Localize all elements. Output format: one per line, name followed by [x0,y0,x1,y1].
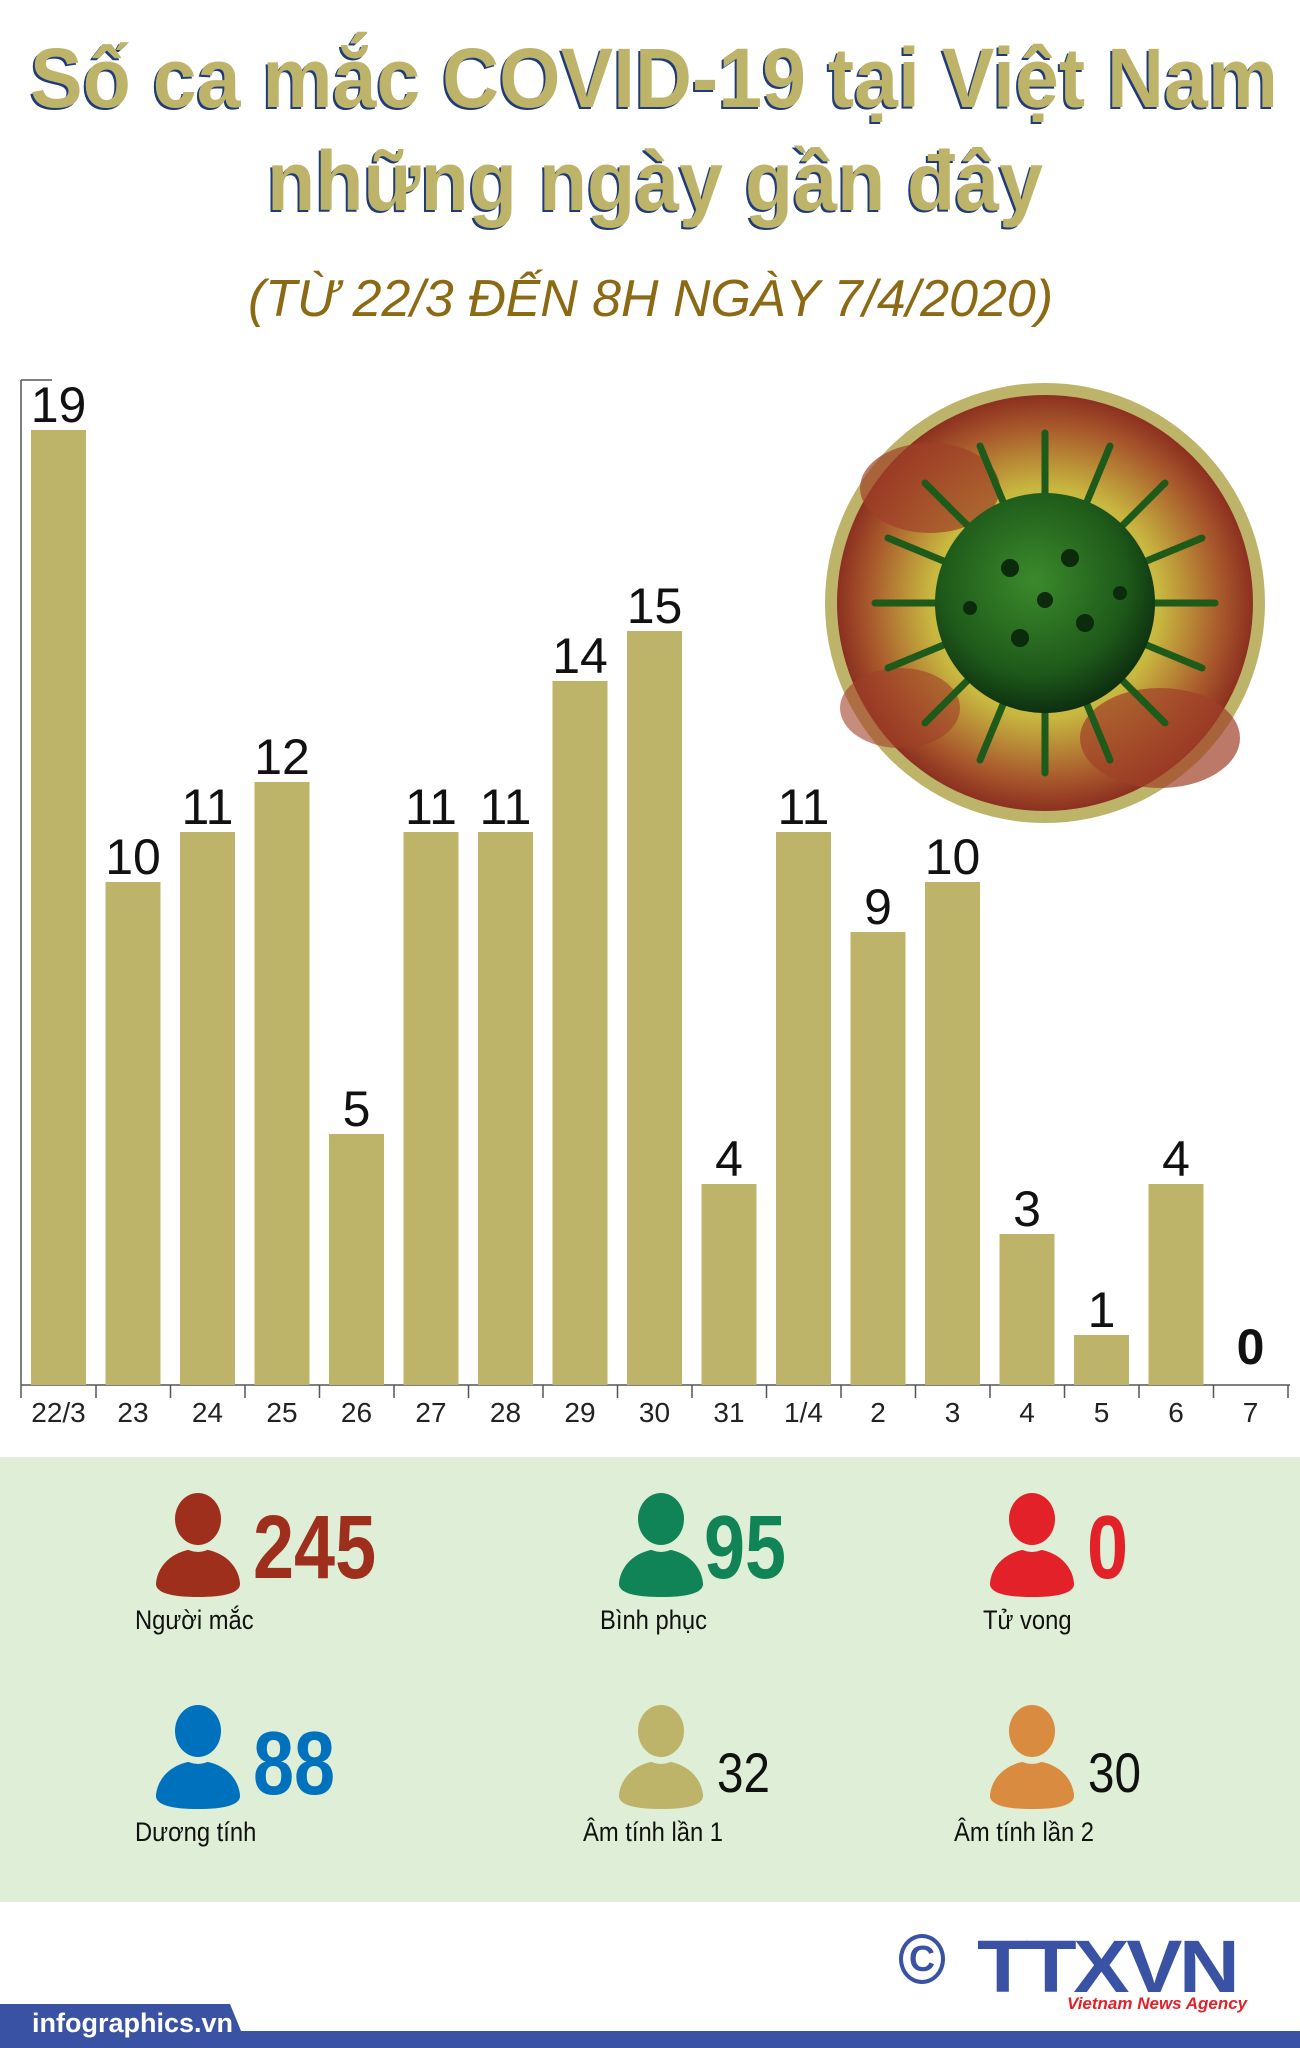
date labels: 4 [1019,1397,1035,1428]
icon: virus image circle [825,383,1265,823]
stat: Người mắc [135,1493,376,1635]
date labels: 24 [192,1397,223,1428]
stat: Âm tính lần 2 [954,1705,1141,1847]
logo: TTXVN: TTXVN [977,1925,1236,2008]
date labels: 27 [415,1397,447,1428]
date labels: 30 [639,1397,670,1428]
value labels: 19 [31,377,86,433]
stat: Dương tính [135,1705,335,1847]
stat: Âm tính lần 2: 30 [1088,1741,1141,1804]
date labels: 31 [713,1397,745,1428]
value labels: 14 [552,628,608,684]
stat: Âm tính lần 1: Âm tính lần 1 [583,1817,723,1847]
value labels: 11 [405,779,457,835]
stat: Âm tính lần 2: Âm tính lần 2 [954,1817,1094,1847]
value labels: 12 [254,729,310,785]
subtitle: (TỪ 22/3 ĐẾN 8H NGÀY 7/4/2020) [248,269,1053,328]
date labels: 26 [341,1397,372,1428]
date labels: 7 [1243,1397,1258,1428]
value labels: 10 [105,829,161,885]
icon: copyright: C [909,1938,935,1979]
value labels: 11 [480,779,531,835]
value labels: 11 [778,779,829,835]
date labels: 28 [490,1397,521,1428]
title line 2: những ngày gần đây [265,136,1041,230]
stat: Dương tính: Dương tính [135,1817,256,1847]
date labels: 3 [945,1397,960,1428]
bar chart [20,377,1290,1428]
value labels: 0 [1237,1319,1264,1375]
value labels: 3 [1013,1181,1041,1237]
value labels: 4 [1162,1131,1190,1187]
panel: stats [0,1457,1300,1902]
stat: Dương tính: 88 [253,1714,335,1814]
value labels: 5 [343,1081,370,1137]
value labels: 11 [182,779,233,835]
value labels: 4 [715,1131,743,1187]
date labels: 6 [1168,1397,1184,1428]
stat: Bình phục [600,1493,786,1635]
footer bar [0,2031,1300,2048]
bars [31,430,1204,1385]
icon: copyright [899,1934,945,1984]
stat: Người mắc: Người mắc [135,1605,254,1635]
stat: Người mắc: 245 [253,1498,376,1598]
date labels: 22/3 [31,1397,86,1428]
stat: Tử vong [983,1493,1128,1635]
date labels: 23 [117,1397,149,1428]
date labels: 29 [564,1397,596,1428]
value labels: 15 [627,578,682,634]
stat: Tử vong: Tử vong [983,1605,1072,1635]
stat: Bình phục: 95 [704,1498,786,1598]
stat: Âm tính lần 1 [583,1705,770,1847]
stat: Tử vong: 0 [1087,1498,1128,1598]
title [28,31,1278,328]
logo: TTXVN: Vietnam News Agency [1067,1994,1247,2013]
title line 2: những ngày gần đây [267,134,1043,228]
value labels: 10 [925,829,980,885]
date labels: 1/4 [784,1397,823,1428]
date labels: 25 [266,1397,298,1428]
value labels: 1 [1088,1282,1115,1338]
value labels [31,377,1264,1375]
date labels: 2 [870,1397,886,1428]
date labels: 5 [1094,1397,1109,1428]
date labels [31,1397,1258,1428]
footer tab: infographics.vn: infographics.vn [32,2008,233,2038]
stat: Bình phục: Bình phục [600,1605,707,1635]
stat: Âm tính lần 1: 32 [717,1741,770,1804]
value labels: 9 [864,879,892,935]
